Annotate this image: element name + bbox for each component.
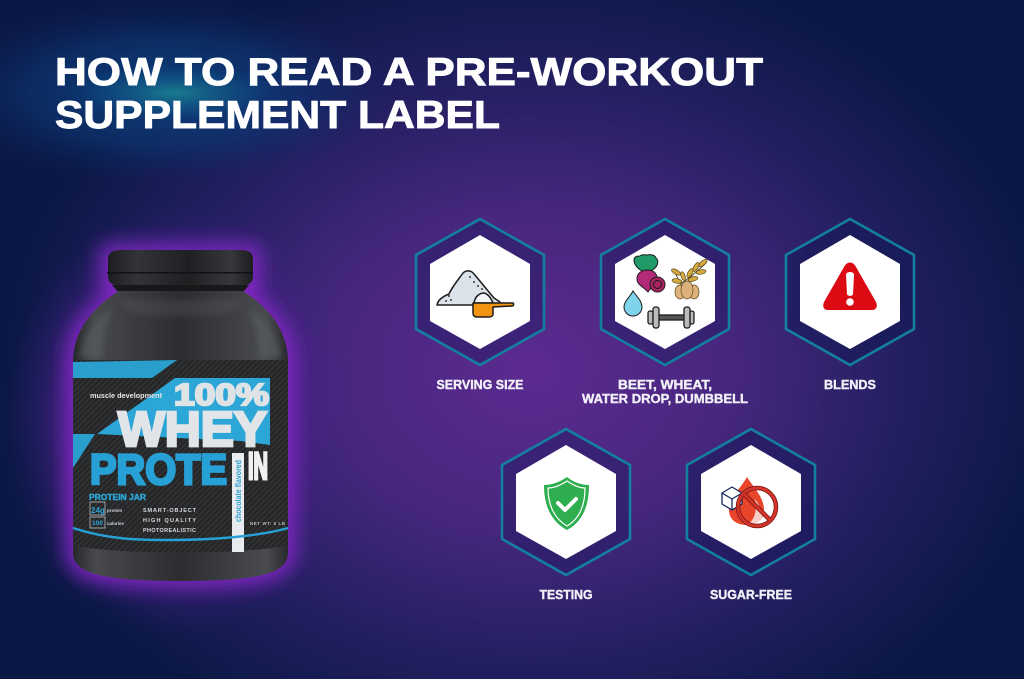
card: sugar-free [687,429,815,602]
label net weight: NET WT: 5 LB [250,521,286,526]
label text: IN: IN [248,446,268,488]
label: SERVING SIZE [436,378,524,392]
label stats: 24g [91,506,105,515]
label [582,378,748,406]
jar shoulder highlights [80,300,281,358]
label blue line [73,528,288,540]
label: BEET, WHEAT, [618,378,712,392]
label: SUGAR-FREE [710,588,792,602]
label text: 100%: 100% [174,377,269,412]
title: HOW TO READ A PRE-WORKOUT [55,51,763,94]
label stats: 100 [92,520,103,527]
label text: PROTEIN JAR: PROTEIN JAR [89,493,146,502]
icon: powder and scoop [437,271,514,317]
title [55,51,763,137]
label features: SMART-OBJECT [143,508,197,514]
label stats [90,502,125,528]
jar cap [107,250,253,291]
icon: no sugar [722,477,776,526]
icon: wheat [671,258,708,299]
label features [143,508,197,534]
label features: HIGH QUALITY [143,518,196,524]
jar body [73,287,288,581]
icon: dumbbell [648,307,694,328]
card: blends [786,219,914,392]
hexagon frame [687,429,815,575]
supplement jar [73,250,288,581]
hexagon frame [601,219,729,365]
label text: muscle development: muscle development [90,391,162,400]
label: TESTING [540,588,592,602]
flavour strip: chocolate flavored [234,460,243,522]
card: serving size [416,219,544,392]
jar glow [73,252,288,580]
card: testing [502,429,630,602]
icon: water drop [624,291,642,316]
icon: warning triangle [823,262,877,310]
blue label panels [73,360,177,378]
hexagon frame [502,429,630,575]
hexagon frame [416,219,544,365]
label: BLENDS [824,378,876,392]
jar label [73,360,288,552]
title: SUPPLEMENT LABEL [55,94,500,137]
label features: PHOTOREALISTIC [143,528,196,534]
icon: beet [634,255,665,292]
card: beet, wheat, water drop, dumbbell [582,219,748,406]
icon: green shield [544,477,589,530]
label text: PROTE: PROTE [90,446,227,494]
label text: WHEY: WHEY [118,403,267,457]
label stats: protein [107,508,123,513]
flavour strip [232,453,244,552]
label stats: calories [107,521,125,526]
hexagon frame [786,219,914,365]
label: WATER DROP, DUMBBELL [582,392,748,406]
